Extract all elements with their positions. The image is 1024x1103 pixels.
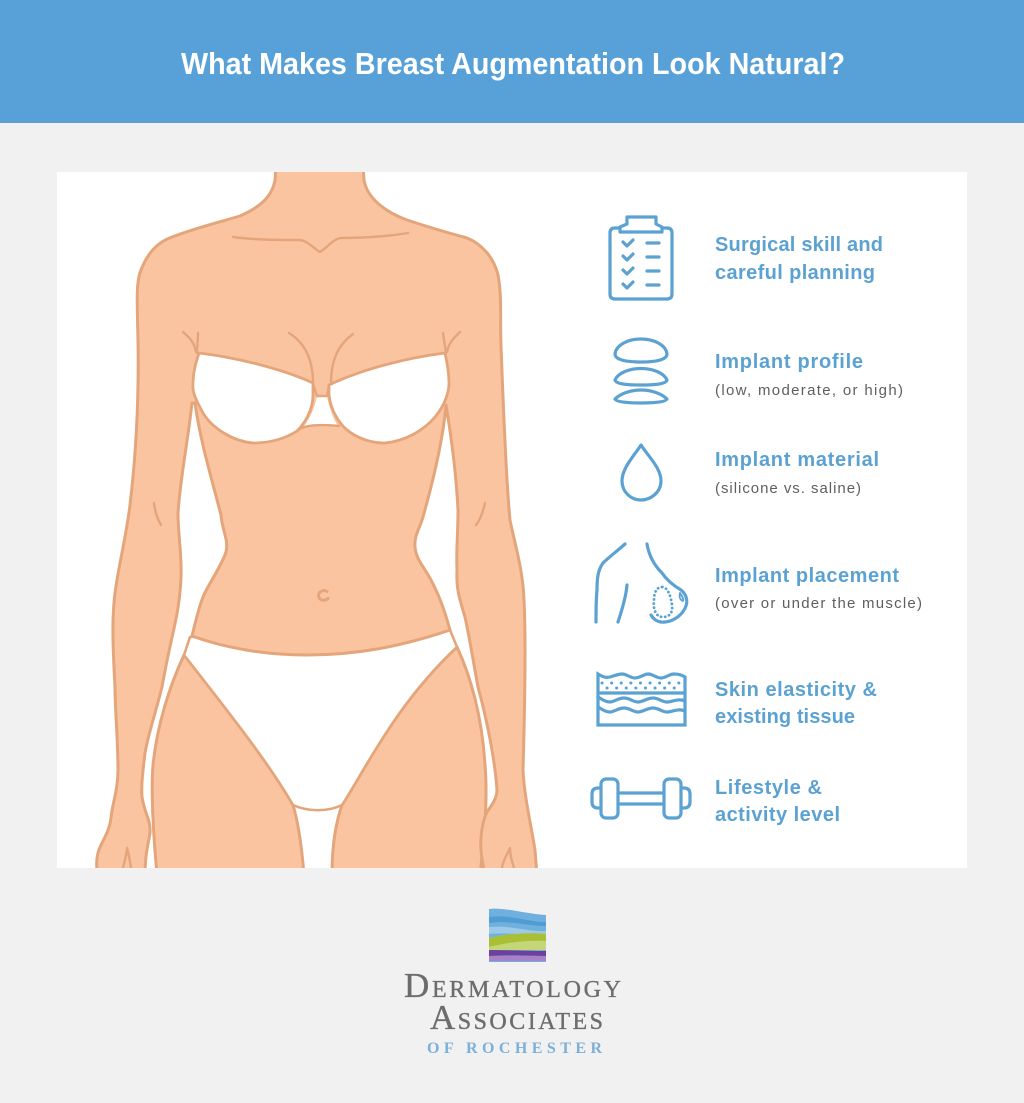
panties	[184, 630, 457, 810]
illustration: female torso in underwear	[97, 165, 537, 875]
label: skin elasticity: Skin elasticity &	[715, 679, 877, 701]
sublabel: implant placement: (over or under the muscle)	[715, 595, 922, 612]
navel	[318, 591, 328, 600]
label: lifestyle: Lifestyle &	[715, 777, 822, 799]
icon: clipboard	[610, 217, 672, 299]
elbow creases	[154, 503, 485, 525]
header banner	[0, 0, 1024, 123]
icon: three implant profiles	[615, 339, 667, 403]
item: implant placement	[596, 544, 922, 622]
item: surgical skill	[610, 217, 883, 299]
icon: droplet	[622, 445, 661, 500]
label: lifestyle: activity level	[715, 804, 840, 826]
sublabel: implant material: (silicone vs. saline)	[715, 480, 861, 497]
finger lines	[123, 848, 514, 868]
item: skin elasticity	[598, 674, 877, 728]
left bra cup	[193, 353, 313, 443]
panel: main white card	[57, 172, 967, 868]
bra centre gap	[304, 397, 337, 426]
icon: side view of breast with dotted implant	[596, 544, 687, 622]
label: implant material: Implant material	[715, 449, 879, 471]
sublabel: implant profile: (low, moderate, or high)	[715, 382, 903, 399]
icon: skin layers	[598, 674, 685, 725]
collarbone line	[233, 233, 408, 252]
logo: Dermatology Associates of Rochester	[404, 909, 621, 1057]
bra bridge and underline	[297, 384, 339, 431]
label: implant placement: Implant placement	[715, 565, 899, 587]
label: surgical skill: Surgical skill and	[715, 234, 883, 256]
logo text: Dermatology: DERMATOLOGY	[404, 966, 621, 1005]
left leg	[152, 655, 304, 875]
breast and underarm creases	[183, 332, 460, 383]
skin silhouette: arms, shoulders, neck and torso	[97, 165, 537, 875]
label: skin elasticity: existing tissue	[715, 706, 855, 728]
item: implant profile	[615, 339, 903, 403]
logo text: Associates: ASSOCIATES	[430, 998, 603, 1037]
title: What Makes Breast Augmentation Look Natural?	[181, 46, 845, 81]
logo mark: wave flag	[489, 909, 546, 962]
label: implant profile: Implant profile	[715, 351, 863, 373]
logo text: of Rochester: OF ROCHESTER	[427, 1040, 602, 1057]
item: implant material	[622, 445, 879, 500]
item: lifestyle	[592, 777, 840, 826]
right bra cup	[329, 353, 449, 443]
icon: dumbbell	[592, 779, 690, 818]
right leg	[332, 647, 486, 875]
label: surgical skill: careful planning	[715, 262, 875, 284]
